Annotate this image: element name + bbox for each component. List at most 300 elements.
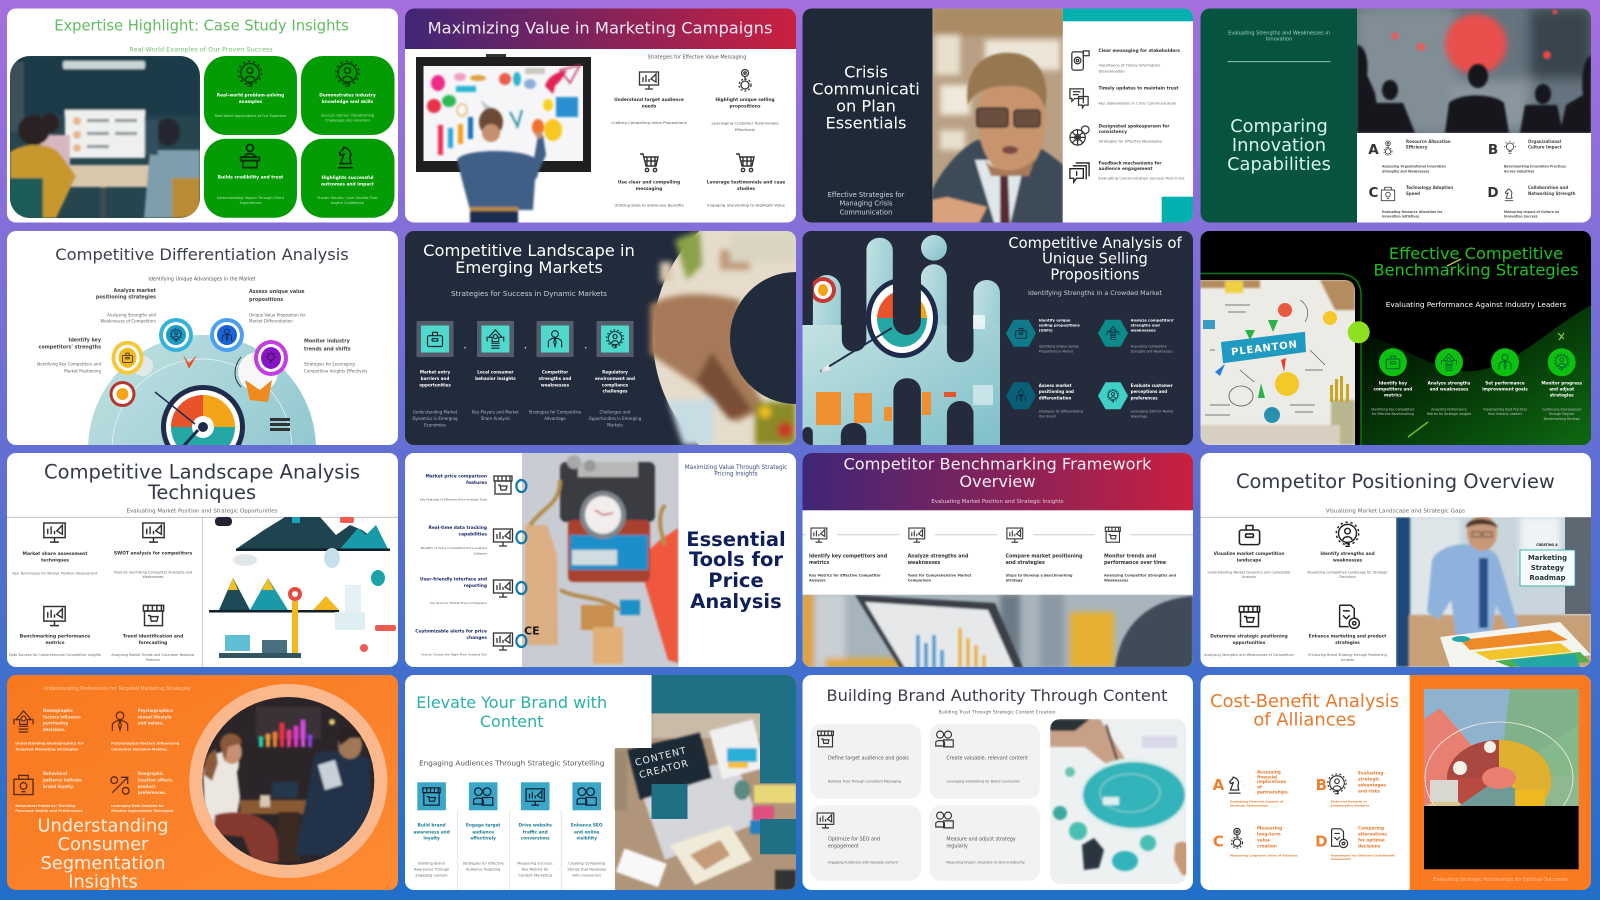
item: Enhance: Insights xyxy=(1341,658,1354,662)
column: Identify key xyxy=(1371,348,1415,416)
item: Identify strengths: Decisions xyxy=(1339,575,1356,579)
item: USPs: selling propositions xyxy=(1039,324,1081,328)
label: Assess unique: Unique Value Proposition for xyxy=(249,312,306,317)
icon: store xyxy=(494,476,512,494)
title: Competitor Benchmarking Framework xyxy=(843,454,1152,474)
title: Innovation xyxy=(1232,135,1326,156)
icon: store xyxy=(1239,606,1260,627)
step: Monitor trends: Weaknesses xyxy=(1104,579,1128,583)
card: Demonstrates industry knowledge: Success Stories: Transforming xyxy=(321,114,374,118)
column: Engage target: Audience Targeting xyxy=(466,868,500,872)
subtitle: Communication xyxy=(840,208,892,216)
item: Assess market: positioning and xyxy=(1039,388,1074,394)
title xyxy=(1210,691,1399,730)
item: Psychographics: Psychological Factors Influencing xyxy=(111,742,180,746)
item: Enhance: Enhance marketing and product xyxy=(1309,633,1386,639)
column: Market entry xyxy=(412,321,458,427)
card: Define target xyxy=(810,724,921,799)
step: Monitor trends xyxy=(1104,527,1177,583)
title: Competitive Landscape in xyxy=(423,241,635,260)
label: Assess unique: propositions xyxy=(249,297,283,303)
column: Enhance SEO xyxy=(567,782,607,878)
column: Enhance SEO: visibility xyxy=(576,835,597,841)
column: Market entry: barriers and xyxy=(421,376,449,380)
subtitle: Pricing Insights xyxy=(714,472,758,478)
icon: target xyxy=(1384,141,1392,155)
column: Regulatory: Markets xyxy=(607,422,623,427)
item A: Assessing Organizational Innovation xyxy=(1382,164,1446,168)
icon: hexagon xyxy=(1098,320,1128,347)
icon: cart xyxy=(736,154,754,172)
step: Analyze strengths: Comparison xyxy=(908,579,932,583)
subtitle: Maximizing Value Through Strategic xyxy=(685,465,787,471)
card: Optimize: Optimize for SEO and xyxy=(828,837,880,843)
column: Local consumer: Key Players and Market xyxy=(472,409,519,414)
icon: store xyxy=(1105,527,1120,542)
item: SWOT: Weaknesses xyxy=(143,575,164,579)
card: Highlights successful outcomes: Proven Results: Case Studies That xyxy=(317,196,378,200)
icon tile xyxy=(521,782,550,810)
item B: Evaluating xyxy=(1358,770,1383,776)
item: Geographic: preferences. xyxy=(138,790,167,794)
label: Monitor industry xyxy=(304,339,368,373)
column: Competitor strengths: Advantage xyxy=(544,416,566,420)
card: Demonstrates industry knowledge xyxy=(301,56,394,135)
photo: laptop with charts xyxy=(802,594,1193,668)
card: Optimize: engagement xyxy=(828,843,859,849)
item B: Risks and Rewards in xyxy=(1331,799,1367,803)
item: Trend: Analyzing Market Trends and Consumer Behavior xyxy=(111,653,195,657)
item D: Collaboration and xyxy=(1528,184,1568,190)
item C: C xyxy=(1369,185,1379,201)
item C: Innovation Initiatives xyxy=(1382,214,1419,218)
column: Regulatory: environment and xyxy=(595,376,635,380)
item: unique selling: Leveraging Customer Testimonials xyxy=(712,120,778,125)
card: Highlights successful outcomes: outcomes and impact xyxy=(321,181,374,187)
item: Geographic: product xyxy=(138,784,155,788)
item: Geographic: Geographic xyxy=(138,770,164,776)
column: Monitor progress: and adjust xyxy=(1549,386,1574,391)
photo: man at whiteboard xyxy=(416,54,591,225)
item: Trend: forecasting xyxy=(139,640,167,646)
item: user-friendly: Top Tools for Market Price Comparison xyxy=(429,601,487,605)
label: Analyze market xyxy=(96,288,157,323)
item A xyxy=(1213,769,1288,807)
photo: content creator desk: CREATOR xyxy=(638,758,690,781)
item: Assess market: Your Brand xyxy=(1039,415,1056,419)
item B: Collaborative Ventures xyxy=(1331,803,1370,807)
item: Demographic: decisions. xyxy=(43,726,66,732)
icon: people xyxy=(936,731,953,747)
step: Monitor trends: Analyzing Competitor Strengths and xyxy=(1104,574,1177,578)
item: Determine: opportunities xyxy=(1233,640,1266,646)
photo: man with strategy roadmap: Strategy xyxy=(1531,564,1565,572)
column: Set performance: improvement goals xyxy=(1482,386,1528,391)
item: Determine xyxy=(1204,606,1294,657)
icon: monitor xyxy=(811,528,827,542)
column: Build brand: Building Brand xyxy=(418,862,445,866)
item: Benchmarking xyxy=(9,606,101,657)
title: Unique Selling xyxy=(1042,250,1148,268)
item: price comparison xyxy=(420,473,526,502)
card: Define target: Define target audience and goals xyxy=(828,756,909,762)
item: Market share xyxy=(12,523,98,576)
column: Set performance xyxy=(1482,348,1528,416)
column: Identify key: Identify key xyxy=(1379,380,1407,385)
card: Builds credibility: Builds credibility and trust xyxy=(218,174,283,180)
title: Understanding xyxy=(37,816,169,836)
item: spokesperson: consistency xyxy=(1098,128,1127,134)
step: Identify key competitors: Key Metrics for Effective Competitor xyxy=(809,574,881,578)
photo: man with strategy roadmap xyxy=(1396,515,1591,667)
column: Analyze strengths xyxy=(1427,348,1472,416)
icon: chess knight xyxy=(1505,189,1516,201)
icon tile xyxy=(417,782,446,810)
card: Builds credibility: Experiences xyxy=(240,201,261,205)
item B: Organizational xyxy=(1528,138,1562,144)
photo: worried man xyxy=(932,8,1067,227)
item C: Speed xyxy=(1406,190,1420,196)
item: Enhance: strategies xyxy=(1335,640,1360,646)
icon: briefcase xyxy=(1239,526,1260,545)
column: Drive website: Content Marketing xyxy=(519,874,552,878)
item: feedback xyxy=(1070,160,1185,182)
column: Market entry: Market entry xyxy=(420,369,450,374)
icon: phone xyxy=(1072,51,1089,70)
item: Psychographics xyxy=(111,708,180,752)
icon tile xyxy=(469,782,498,810)
teal overlay blocks xyxy=(652,675,796,854)
card: Real-world problem-solving: Real-world problem-solving xyxy=(217,92,284,98)
step: Identify key competitors: Analysis xyxy=(809,579,825,583)
item: Visualize: Analysis xyxy=(1242,575,1256,579)
column: Market entry: Economies xyxy=(424,422,446,427)
item: Evaluate customer: Evaluate customer xyxy=(1131,382,1173,388)
item: Assess market: Assess market xyxy=(1039,382,1072,388)
item: Identify strengths xyxy=(1307,522,1388,579)
column: Set performance: from Industry Leaders xyxy=(1488,412,1522,416)
label: Assess unique xyxy=(249,289,306,323)
item A: Strengths and Weaknesses xyxy=(1382,170,1430,174)
item: Assess market xyxy=(1006,382,1083,419)
title xyxy=(843,454,1152,491)
step: Compare market xyxy=(1006,528,1083,583)
illustration: pill-cut target scene xyxy=(802,225,1000,463)
icon: monitor xyxy=(494,633,512,650)
step: Analyze strengths: weaknesses xyxy=(908,560,940,566)
panel: Unique Selling Propositions xyxy=(802,225,1194,463)
item: audience needs xyxy=(611,72,687,125)
subtitle: Managing Crisis xyxy=(839,200,893,208)
column: Drive website: traffic and xyxy=(523,829,548,835)
card: Builds credibility xyxy=(204,139,297,218)
column: Market entry: Dynamics in Emerging xyxy=(412,416,458,420)
item: messaging xyxy=(614,154,684,208)
column: Drive website: Key Metrics for xyxy=(522,868,549,872)
item B: B xyxy=(1488,142,1498,158)
subtitle: Strategies for Success in Dynamic Markets xyxy=(451,289,607,298)
step: Compare market: and strategies xyxy=(1006,560,1045,566)
title xyxy=(813,66,918,128)
title: Expertise Highlight: Case Study Insights xyxy=(54,18,349,34)
label: Analyze market: positioning strategies xyxy=(96,295,156,301)
icon: house xyxy=(14,711,33,732)
item: Identify strengths: Visualizing Competitive Landscape for Strategic xyxy=(1307,570,1388,574)
column: Engage target: effectively xyxy=(471,835,496,841)
item: Evaluate customer: preferences xyxy=(1131,395,1158,400)
card: Highlights successful outcomes xyxy=(301,139,394,218)
column: Competitor strengths: weaknesses xyxy=(541,382,570,387)
panel: Landscape Analysis Techniques xyxy=(7,453,398,667)
title: Emerging Markets xyxy=(455,258,603,277)
column: Local consumer: behavior insights xyxy=(475,376,516,380)
item A: implications xyxy=(1257,778,1287,784)
item: Analyze competitors: Strengths and Weaknesses xyxy=(1131,350,1173,354)
item A: Evaluating Financial Impacts of xyxy=(1230,799,1284,803)
item: Market share: techniques xyxy=(41,557,69,563)
photo: PLEANTON sketch board xyxy=(1200,280,1355,445)
step: Monitor trends: performance over time xyxy=(1104,560,1167,566)
panel: Emerging Markets xyxy=(405,191,947,485)
subtitle: Evaluating Strategic Partnerships for Optimal Outcomes xyxy=(1433,877,1568,883)
item: Demographic: factors influence xyxy=(43,714,81,719)
item: Behavioral xyxy=(14,770,83,813)
subtitle: Visualizing Market Landscape and Strategic Gaps xyxy=(1326,508,1465,514)
item: Identify strengths: weaknesses xyxy=(1333,557,1363,563)
left dark column xyxy=(802,8,933,222)
card: Demonstrates industry knowledge: knowledge and skills xyxy=(322,98,374,104)
item B: strategic xyxy=(1358,776,1380,782)
column: Competitor strengths: Strategies for Competitive xyxy=(529,409,582,414)
label: Identify key: Identifying Key Competitors and xyxy=(37,361,101,366)
item B: advantages xyxy=(1358,782,1386,788)
title xyxy=(44,460,360,504)
title xyxy=(37,816,169,892)
item C xyxy=(1213,825,1298,857)
column: Identify key: metrics xyxy=(1384,392,1402,397)
panel: Positioning Overview xyxy=(1200,453,1592,667)
item: testimonials: studies xyxy=(737,186,755,192)
icon: dollar notes xyxy=(1070,163,1089,182)
column: Monitor progress xyxy=(1541,348,1583,421)
item: Geographic: Leveraging Data Analytics for xyxy=(111,804,164,808)
icon: monitor xyxy=(1007,528,1023,542)
item: Evaluate customer: perceptions and xyxy=(1131,388,1167,394)
column: Build brand: Awareness Through xyxy=(414,868,449,872)
item: real-time xyxy=(421,524,526,555)
icon: hexagon xyxy=(1006,320,1036,347)
card: Demonstrates industry knowledge: Challenges into Solutions xyxy=(325,118,370,122)
item B: Across Industries xyxy=(1504,170,1534,174)
item: Geographic: location affects xyxy=(138,777,173,782)
icon: chat xyxy=(1070,89,1088,108)
item C: Technology Adoption xyxy=(1406,184,1453,190)
title: Elevate Your Brand with xyxy=(416,693,607,712)
column: Local consumer: Local consumer xyxy=(477,369,515,374)
photo: strategy wheel and hand xyxy=(1050,719,1190,884)
item B: B xyxy=(1316,776,1327,794)
item D: Assessment xyxy=(1331,857,1351,861)
label: Monitor industry: Competitive Insights Effectively xyxy=(304,368,368,373)
column: Regulatory xyxy=(589,321,642,427)
panel: Maximizing Value xyxy=(405,8,796,225)
panel: Crisis Communication xyxy=(802,8,1194,227)
item: price comparison: Market price comparison xyxy=(425,473,487,479)
column: Engage target xyxy=(463,782,505,872)
title: Competitive Differentiation Analysis xyxy=(55,245,349,264)
header band xyxy=(802,453,1194,510)
column: Enhance SEO: Creating Compelling xyxy=(568,862,605,866)
image outline xyxy=(1200,274,1361,445)
title: Maximizing Value in Marketing Campaigns xyxy=(428,18,772,38)
icon ring: cyan xyxy=(159,318,193,352)
item C xyxy=(1369,184,1453,218)
item A: Efficiency xyxy=(1406,144,1428,149)
item: Demographic: Demographic xyxy=(43,708,74,712)
accent: lime circle xyxy=(1348,321,1370,343)
green column xyxy=(1200,8,1357,222)
icon: monitor xyxy=(909,528,925,542)
item: clear messaging: Clear messaging for stakeholders xyxy=(1098,48,1180,54)
item D: Innovation Success xyxy=(1504,214,1538,218)
label: Identify key: Market Positioning xyxy=(64,368,101,373)
icon: people xyxy=(936,812,953,828)
column: Regulatory: Challenges and xyxy=(600,409,631,414)
label: Identify key xyxy=(37,337,102,373)
item: USPs xyxy=(1006,319,1081,354)
item: Demographic: purchasing xyxy=(43,720,68,725)
label: Identify key: Identify key xyxy=(69,337,102,343)
label: Analyze market: Analyzing Strengths and xyxy=(107,312,156,317)
title: Essential xyxy=(686,528,786,551)
item B xyxy=(1488,138,1566,174)
item: Psychographics: Psychographics xyxy=(138,708,174,712)
item C: Measuring Long-term Value of Alliances xyxy=(1230,853,1298,857)
card: Highlights successful outcomes: Inspire Confidence xyxy=(331,201,364,205)
item D: alternatives xyxy=(1358,831,1387,837)
photo: camera and price tags xyxy=(522,453,679,667)
icon: bulb xyxy=(1504,141,1516,153)
title: Crisis xyxy=(844,62,888,82)
item: Analyze competitors: Evaluating Competitive xyxy=(1131,345,1167,349)
column: Analyze strengths: Metrics for Strategic Insights xyxy=(1427,412,1472,416)
item: Behavioral: patterns indicate xyxy=(43,777,82,782)
icon: green circle xyxy=(1491,348,1519,376)
column: Identify key: Identifying Key Competitors xyxy=(1371,407,1415,411)
icon: wheel xyxy=(1070,126,1089,145)
column: Build brand: Engaging Content xyxy=(415,874,448,878)
column: Competitor strengths: Competitor xyxy=(542,369,569,374)
icon: monitor xyxy=(494,580,512,597)
item: Demographic: Targeted Marketing Strategies xyxy=(15,748,78,752)
item: Analyze competitors: strengths and xyxy=(1131,324,1160,328)
column: Set performance: Set performance xyxy=(1485,380,1525,385)
item: Behavioral: Behavioral Patterns: Tracking xyxy=(15,804,76,808)
column: Analyze strengths: and weaknesses xyxy=(1430,386,1469,391)
column: Drive website: Drive website xyxy=(519,822,552,828)
column: Monitor progress: through Regular xyxy=(1549,412,1575,416)
icon tile xyxy=(416,321,454,357)
green wave background xyxy=(1361,305,1591,445)
column: Regulatory: Opportunities in Emerging xyxy=(589,416,642,420)
column: Enhance SEO: Enhance SEO xyxy=(571,822,603,828)
item: alerts: Customizable alerts for price xyxy=(415,628,487,634)
item: Visualize: Understanding Market Dynamics and Competitor xyxy=(1207,570,1291,574)
item: spokesperson xyxy=(1070,123,1170,145)
item: Evaluate customer: Leveraging USPs for Market xyxy=(1131,410,1174,414)
title: Segmentation xyxy=(41,853,165,874)
subtitle: Building Trust Through Strategic Content Creation xyxy=(939,710,1055,716)
label: Analyze market: Weaknesses of Competitors xyxy=(100,318,156,323)
item D: D xyxy=(1315,833,1328,851)
icon: chess knight xyxy=(338,147,358,168)
step: Identify key competitors xyxy=(809,528,888,583)
teal corner block xyxy=(1162,197,1194,223)
item: price comparison: Key Features of Effective Price Analysis Tools xyxy=(420,498,487,502)
item: Analyze competitors: weaknesses xyxy=(1131,329,1156,333)
item: testimonials: Engaging Storytelling to Highlight Value xyxy=(707,202,785,208)
card: Measure xyxy=(930,805,1040,881)
item: clear messaging xyxy=(1072,48,1180,73)
panel: Brand Authority xyxy=(802,675,1194,890)
item: Trend: Patterns xyxy=(146,658,160,662)
step: Analyze strengths: Analyze strengths and xyxy=(908,553,969,559)
item: Visualize: Visualize market competition xyxy=(1214,550,1284,556)
item: timely updates: Timely updates to maintain trust xyxy=(1098,86,1178,92)
item: timely updates xyxy=(1070,86,1178,108)
photo: man with strategy roadmap: Roadmap xyxy=(1530,574,1566,582)
column: Build brand: Build brand xyxy=(418,822,446,828)
title: Tools for xyxy=(689,548,783,571)
item: Enhance: Enhancing Brand Strategy through Positioning xyxy=(1308,653,1387,657)
title: Building Brand Authority Through Content xyxy=(827,686,1167,705)
photo: camera and price tags: CE xyxy=(524,624,540,638)
item: messaging: messaging xyxy=(636,186,662,192)
item B xyxy=(1316,770,1386,807)
item: Analyze competitors xyxy=(1098,319,1174,354)
icon: monitor xyxy=(817,813,834,828)
column: Competitor strengths: strengths and xyxy=(539,376,571,380)
subtitle: Evaluating Market Position and Strategic Insights xyxy=(931,499,1064,505)
panel: Comparing Innovation xyxy=(1200,8,1592,222)
icon: gear A xyxy=(238,61,262,86)
item: Psychographics: reveal lifestyle xyxy=(138,714,172,719)
subtitle: Understanding Preferences for Targeted Marketing Strategies xyxy=(43,686,191,692)
icon: document xyxy=(1340,605,1359,628)
panel: Competitive Differentiation xyxy=(7,231,398,563)
title: Analysis xyxy=(690,590,782,613)
card: Measure: Measuring Impact: Analytics for Brand Authority xyxy=(946,861,1025,865)
item C: Evaluating Resource Allocation for xyxy=(1382,210,1443,214)
item: SWOT: Tools for Identifying Competitor Strengths and xyxy=(113,570,192,574)
item: user-friendly xyxy=(420,576,526,605)
item: SWOT: SWOT analysis for competitors xyxy=(114,550,192,556)
column: Identify key: for Effective Benchmarking xyxy=(1372,412,1414,416)
column: Competitor strengths xyxy=(529,321,582,420)
subtitle: Effective Strategies for xyxy=(828,191,905,199)
item: unique selling: propositions xyxy=(730,103,761,109)
orange column xyxy=(1410,675,1591,890)
item: Benchmarking: metrics xyxy=(46,640,65,646)
icon tile xyxy=(596,321,634,357)
step: Identify key competitors: Identify key competitors and xyxy=(809,553,888,559)
item: unique selling: Effectively xyxy=(735,126,756,132)
title: Communicati xyxy=(812,80,920,98)
item: Demographic xyxy=(14,708,84,752)
item: USPs: Identify unique xyxy=(1039,319,1071,323)
subtitle: Evaluating Market Position and Strategic Opportunities xyxy=(127,508,278,514)
item A: Resource Allocation xyxy=(1406,138,1451,144)
